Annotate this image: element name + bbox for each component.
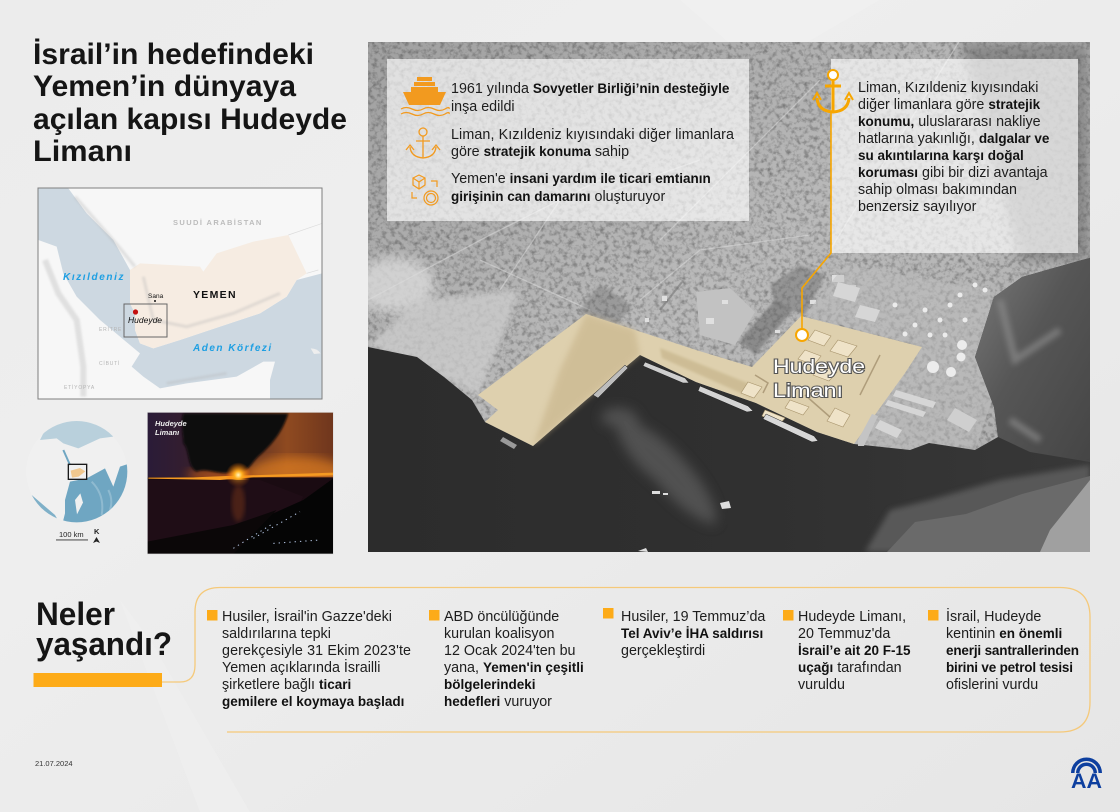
event 2: yana, Yemen'in çeşitli <box>444 660 584 676</box>
scale bar and north arrow <box>56 527 100 543</box>
aerial lagoon <box>975 258 1090 462</box>
aerial sandbank <box>865 465 1090 552</box>
event 2: bölgelerindeki <box>444 677 536 692</box>
map: Yemen location <box>38 188 322 399</box>
logo: AA: AA <box>1071 770 1102 793</box>
event 5: birini ve petrol tesisi <box>946 660 1073 675</box>
event 1: gemilere el koymaya başladı <box>222 694 404 709</box>
event 3: gerçekleştirdi <box>621 643 705 659</box>
photo: port on fire: Hudeyde <box>155 419 187 428</box>
aerial land <box>368 42 1090 450</box>
info panel: facts: göre stratejik konuma sahip <box>451 144 629 160</box>
icon: anchor <box>406 128 440 158</box>
storage tanks <box>892 282 988 377</box>
event 5: İsrail, Hudeyde <box>946 607 1041 625</box>
aerial satellite view <box>355 40 1090 552</box>
event 4: 20 Temmuz'da <box>798 626 890 642</box>
aerial sea <box>368 258 1090 552</box>
scale bar and north arrow: 100 km <box>59 530 84 539</box>
event 5: enerji santrallerinden <box>946 643 1079 658</box>
icon: ship <box>401 77 449 116</box>
icon: callout anchor <box>813 70 853 112</box>
event 5: ofislerini vurdu <box>946 677 1038 693</box>
label: port name <box>773 357 865 402</box>
event 4: İsrail’e ait 20 F-15 <box>798 643 911 658</box>
roads <box>368 40 960 310</box>
label: port name: Hudeyde <box>773 357 865 378</box>
info panel: facts <box>387 59 749 221</box>
event 3: Husiler, 19 Temmuz’da <box>621 609 765 625</box>
text: fact 2: Liman, Kızıldeniz kıyısındaki diğer limanlara <box>451 127 734 143</box>
event 1: şirketlere bağlı ticari <box>222 677 351 693</box>
title: Limanı <box>33 135 132 168</box>
sediment plume <box>602 408 716 525</box>
event 3 <box>603 608 765 659</box>
map labels <box>63 218 273 391</box>
map labels: ETİYOPYA <box>64 384 95 391</box>
title: Yemen’in dünyaya <box>33 70 296 103</box>
map labels: Kızıldeniz <box>63 272 125 283</box>
heading accent bar <box>34 673 162 687</box>
logo: AA <box>1071 758 1102 793</box>
heading: what happened <box>36 596 172 662</box>
event 2: ABD öncülüğünde <box>444 609 559 625</box>
callout dot <box>796 329 808 341</box>
title: açılan kapısı Hudeyde <box>33 103 347 136</box>
title <box>33 38 347 168</box>
text: fact 3: Yemen'e insani yardım ile ticari emtianın <box>451 171 711 187</box>
text: strategic location: sahip olması bakımından <box>858 182 1017 198</box>
event 1: Husiler, İsrail'in Gazze'deki <box>222 607 392 625</box>
map labels: Sana <box>148 293 164 300</box>
photo: port on fire: Limanı <box>155 428 179 437</box>
info panel: strategic location <box>831 59 1078 253</box>
heading: what happened: Neler <box>36 596 115 632</box>
map labels: ERİTRE <box>99 326 122 333</box>
text: strategic location: Liman, Kızıldeniz kıyısındaki <box>858 80 1038 96</box>
event 4: uçağı tarafından <box>798 660 902 676</box>
event 1: saldırılarına tepki <box>222 626 331 642</box>
label: port name: Limanı <box>773 381 843 402</box>
timeline frame <box>162 588 1090 732</box>
port area highlight <box>478 314 922 446</box>
event 3: Tel Aviv’e İHA saldırısı <box>621 626 763 641</box>
info panel: facts: inşa edildi <box>451 99 515 115</box>
ships <box>500 362 878 552</box>
map labels: YEMEN <box>193 289 237 301</box>
heading: what happened: yaşandı? <box>36 626 172 662</box>
settlement blocks <box>578 265 856 355</box>
text: strategic location: koruması gibi bir dizi avantaja <box>858 165 1048 181</box>
map Yemen land <box>130 235 307 348</box>
text: fact 1: 1961 yılında Sovyetler Birliği’nin desteğiyle <box>451 81 730 97</box>
date: 21.07.2024 <box>35 759 73 768</box>
refinery area <box>805 265 992 450</box>
event 1: Yemen açıklarında İsrailli <box>222 658 380 676</box>
map labels: SUUDİ ARABİSTAN <box>173 218 263 227</box>
event 2: kurulan koalisyon <box>444 626 555 642</box>
map labels: CİBUTİ <box>99 360 120 367</box>
info panel: facts: girişinin can damarını oluşturuyor <box>451 189 665 205</box>
scale bar and north arrow: K <box>94 527 100 536</box>
text: strategic location: benzersiz sayılıyor <box>858 199 977 215</box>
map labels: Hudeyde <box>128 315 162 325</box>
event 5: kentinin en önemli <box>946 626 1062 642</box>
event 1 <box>207 607 411 709</box>
title: İsrail’in hedefindeki <box>33 38 314 71</box>
icon: trade goods <box>412 175 438 205</box>
event 4 <box>783 609 911 693</box>
photo: port on fire <box>147 412 347 554</box>
event 2 <box>429 609 584 710</box>
text: strategic location <box>858 80 1050 215</box>
map sea <box>38 188 322 399</box>
event 4: vuruldu <box>798 677 845 693</box>
globe locator <box>32 421 128 522</box>
event 2: hedefleri vuruyor <box>444 694 552 710</box>
text: strategic location: diğer limanlara göre stratejik <box>858 97 1041 113</box>
text: strategic location: konumu, uluslararası nakliye <box>858 114 1041 130</box>
text: strategic location: hatlarına yakınlığı, dalgalar ve <box>858 131 1050 147</box>
event 5 <box>928 607 1079 693</box>
callout leader line <box>802 113 831 330</box>
text: strategic location: su akıntılarına karşı doğal <box>858 148 1024 163</box>
event 2: 12 Ocak 2024'ten bu <box>444 643 576 659</box>
map labels: Aden Körfezi <box>192 343 273 354</box>
event 1: gerekçesiyle 31 Ekim 2023'te <box>222 643 411 659</box>
event 4: Hudeyde Limanı, <box>798 609 906 625</box>
industrial blocks <box>833 282 977 438</box>
